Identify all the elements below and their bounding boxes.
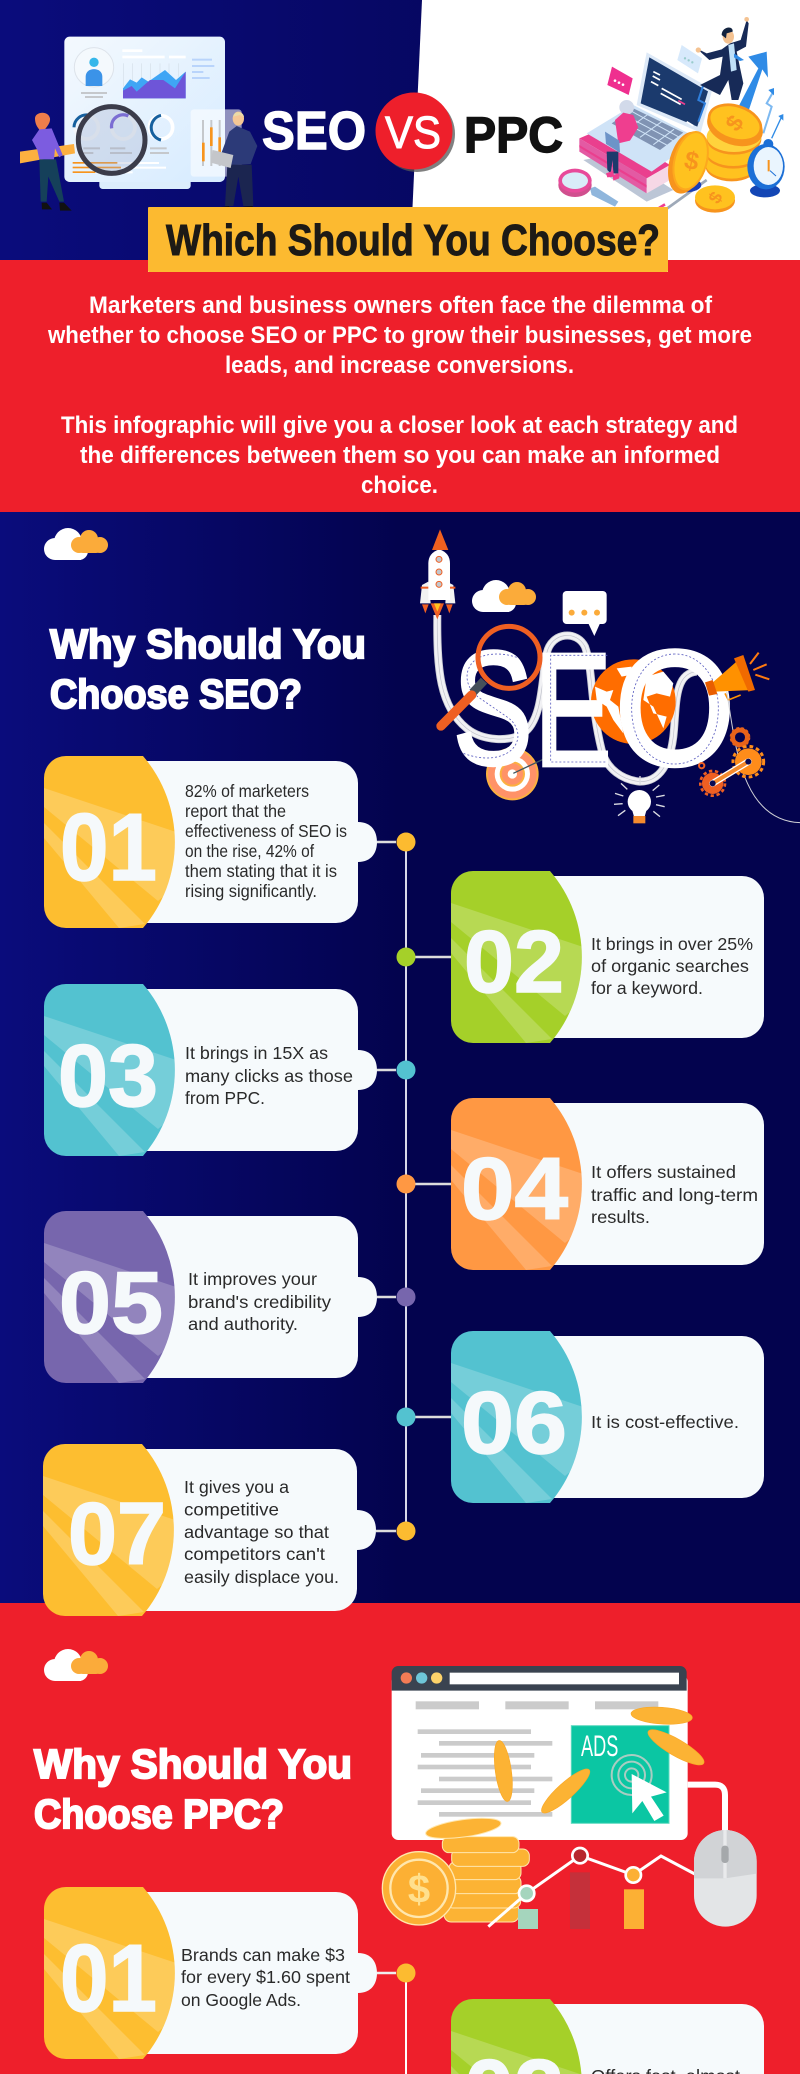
number: 05: [59, 1253, 163, 1352]
card 04: [396, 1098, 764, 1270]
number: 01: [60, 1925, 157, 2032]
badge: VS: [376, 92, 455, 172]
wire: [727, 692, 800, 823]
card text: advantage so that: [184, 1522, 329, 1542]
badge: VS: VS: [385, 107, 441, 158]
intro text block: whether to choose SEO or PPC to grow their businesses, get more: [47, 322, 752, 349]
figure: man: [211, 112, 257, 210]
card text: [185, 1043, 353, 1108]
coin stack: [424, 1814, 529, 1922]
number: 02: [464, 912, 564, 1011]
cable: [688, 1785, 725, 1832]
icons: gears: [699, 728, 764, 796]
card text: on Google Ads.: [181, 1990, 301, 2010]
node: [396, 1174, 416, 1194]
figure: seated woman: [605, 100, 638, 181]
coins stack: $: [720, 110, 749, 136]
number: 06: [461, 1373, 567, 1472]
illustration: browser, coins and mouse: [382, 1666, 757, 1929]
icon: target: [486, 748, 547, 800]
node: [396, 1522, 416, 1540]
icon: rocket: [420, 529, 455, 619]
node: [396, 1288, 416, 1306]
flying coins: [491, 1705, 708, 1818]
laptop: [587, 52, 712, 172]
letters: SEO: [453, 619, 734, 799]
letters: SEO: S: [453, 619, 532, 797]
card 01: [44, 756, 416, 928]
card 05: [44, 1211, 416, 1383]
panel: intro: [0, 260, 800, 512]
chat bubble: [563, 591, 607, 636]
banner: Which Should You Choose?: [148, 207, 668, 272]
card text: [591, 1162, 758, 1227]
panel: why PPC: [0, 1444, 800, 2074]
arrows: [739, 52, 783, 138]
heading: Why Should You Choose PPC: [34, 1741, 352, 1837]
PPC card 01: [44, 1887, 416, 2059]
card text: It brings in over 25%: [591, 934, 753, 954]
icon: cloud: [472, 580, 536, 612]
title: SEO vs PPC: PPC: [464, 107, 563, 163]
line chart with bars: [488, 1848, 697, 1929]
title: SEO vs PPC: [262, 92, 563, 172]
icon: cloud: [44, 528, 108, 560]
ad panel: ADS: [581, 1730, 618, 1763]
PPC timeline spine: [405, 1973, 407, 2074]
intro text block: choice.: [361, 472, 438, 499]
card text: from PPC.: [185, 1088, 265, 1108]
coins stack: [662, 99, 768, 213]
letter stitching: [463, 654, 718, 764]
card text: brand's credibility: [188, 1292, 331, 1312]
icon: mouse: [694, 1830, 757, 1927]
card text: competitive: [184, 1500, 279, 1520]
card text: results.: [591, 1207, 650, 1227]
node: [396, 1060, 416, 1080]
card text: Brands can make $3: [181, 1945, 345, 1965]
card text: them stating that it is: [185, 861, 337, 881]
number: 03: [58, 1026, 158, 1125]
intro text block: Marketers and business owners often face the dilemma of: [89, 292, 713, 319]
panel: why SEO: [0, 512, 800, 1603]
letters: SEO: E: [534, 620, 611, 799]
PPC card 02: [451, 1999, 764, 2074]
node: [396, 832, 416, 852]
icon: magnifier: [558, 169, 618, 207]
coins stack: $: [682, 146, 701, 176]
number: 04: [461, 1139, 568, 1238]
card text: [181, 1945, 350, 2010]
card 06: [396, 1331, 764, 1503]
hero background: [0, 0, 800, 262]
node: [396, 948, 416, 966]
intro text block: the differences between them so you can make an informed: [80, 442, 720, 469]
card 07: [43, 1444, 416, 1616]
icon: light bulb: [614, 776, 665, 823]
browser window: [392, 1666, 688, 1840]
card text: It gives you a: [184, 1477, 289, 1497]
illustration: analytics dashboard with two people: [20, 37, 257, 211]
intro text block: leads, and increase conversions.: [225, 352, 574, 379]
illustration: laptop, coins and businessman: [558, 17, 785, 213]
card text: 82% of marketers: [185, 781, 309, 801]
card text: traffic and long-term: [591, 1185, 758, 1205]
timeline spine: [405, 842, 407, 1531]
figure: woman: [32, 113, 72, 211]
icon: globe: [591, 659, 676, 744]
coin with dollar: [382, 1852, 456, 1925]
icon: megaphone: [705, 653, 769, 700]
icon: pen: [657, 180, 707, 210]
icon: magnifying glass: [20, 107, 145, 173]
books: [579, 127, 670, 193]
card text: competitors can't: [184, 1544, 325, 1564]
card text: rising significantly.: [185, 881, 317, 901]
icon: stopwatch: [747, 139, 785, 197]
card text: It brings in 15X as: [185, 1043, 328, 1063]
chat bubbles: [607, 45, 702, 95]
heading: Why Should You Choose SEO: Why Should You: [50, 621, 366, 667]
card 03: [44, 984, 416, 1156]
card 02: [396, 871, 764, 1043]
intro text block: This infographic will give you a closer look at each strategy and: [61, 412, 738, 439]
card text: effectiveness of SEO is: [185, 821, 347, 841]
card text: easily displace you.: [184, 1567, 339, 1587]
card text: for every $1.60 spent: [181, 1967, 350, 1987]
card text: It is cost-effective.: [591, 1412, 739, 1432]
card text: [591, 934, 753, 998]
card text: [185, 781, 347, 901]
trail: [437, 615, 697, 782]
icon: cloud: [44, 1649, 108, 1681]
number: 07: [68, 1484, 166, 1583]
heading: Why Should You Choose SEO: Choose SEO?: [50, 671, 302, 717]
heading: Why Should You Choose PPC: Choose PPC?: [34, 1791, 284, 1837]
node: [396, 1408, 416, 1426]
title: SEO vs PPC: SEO: [262, 101, 366, 161]
heading: Why Should You Choose SEO: [50, 621, 366, 717]
letters: SEO: O: [616, 620, 734, 798]
card text: many clicks as those: [185, 1066, 353, 1086]
translucent chart card: [191, 109, 242, 177]
card text: on the rise, 42% of: [185, 841, 314, 861]
card text: for a keyword.: [591, 978, 703, 998]
coins stack: $: [704, 188, 727, 207]
icon: magnifying glass: [441, 626, 540, 726]
ad panel: [571, 1726, 669, 1823]
card text: [184, 1477, 339, 1587]
heading: Why Should You Choose PPC: Why Should You: [34, 1741, 352, 1787]
card text: report that the: [185, 801, 286, 821]
number: 01: [60, 794, 157, 901]
card text: of organic searches: [591, 956, 749, 976]
illustration: SEO letters with rocket: [420, 529, 800, 823]
intro text block: [47, 292, 752, 499]
node: [396, 1964, 416, 1982]
card text: [188, 1269, 331, 1334]
card text: It improves your: [188, 1269, 317, 1289]
banner: Which Should You Choose?: Which Should You Choose?: [166, 216, 660, 265]
card text: and authority.: [188, 1314, 298, 1334]
coin with dollar: $: [408, 1867, 430, 1911]
figure: businessman: [696, 17, 749, 100]
card text: It offers sustained: [591, 1162, 736, 1182]
